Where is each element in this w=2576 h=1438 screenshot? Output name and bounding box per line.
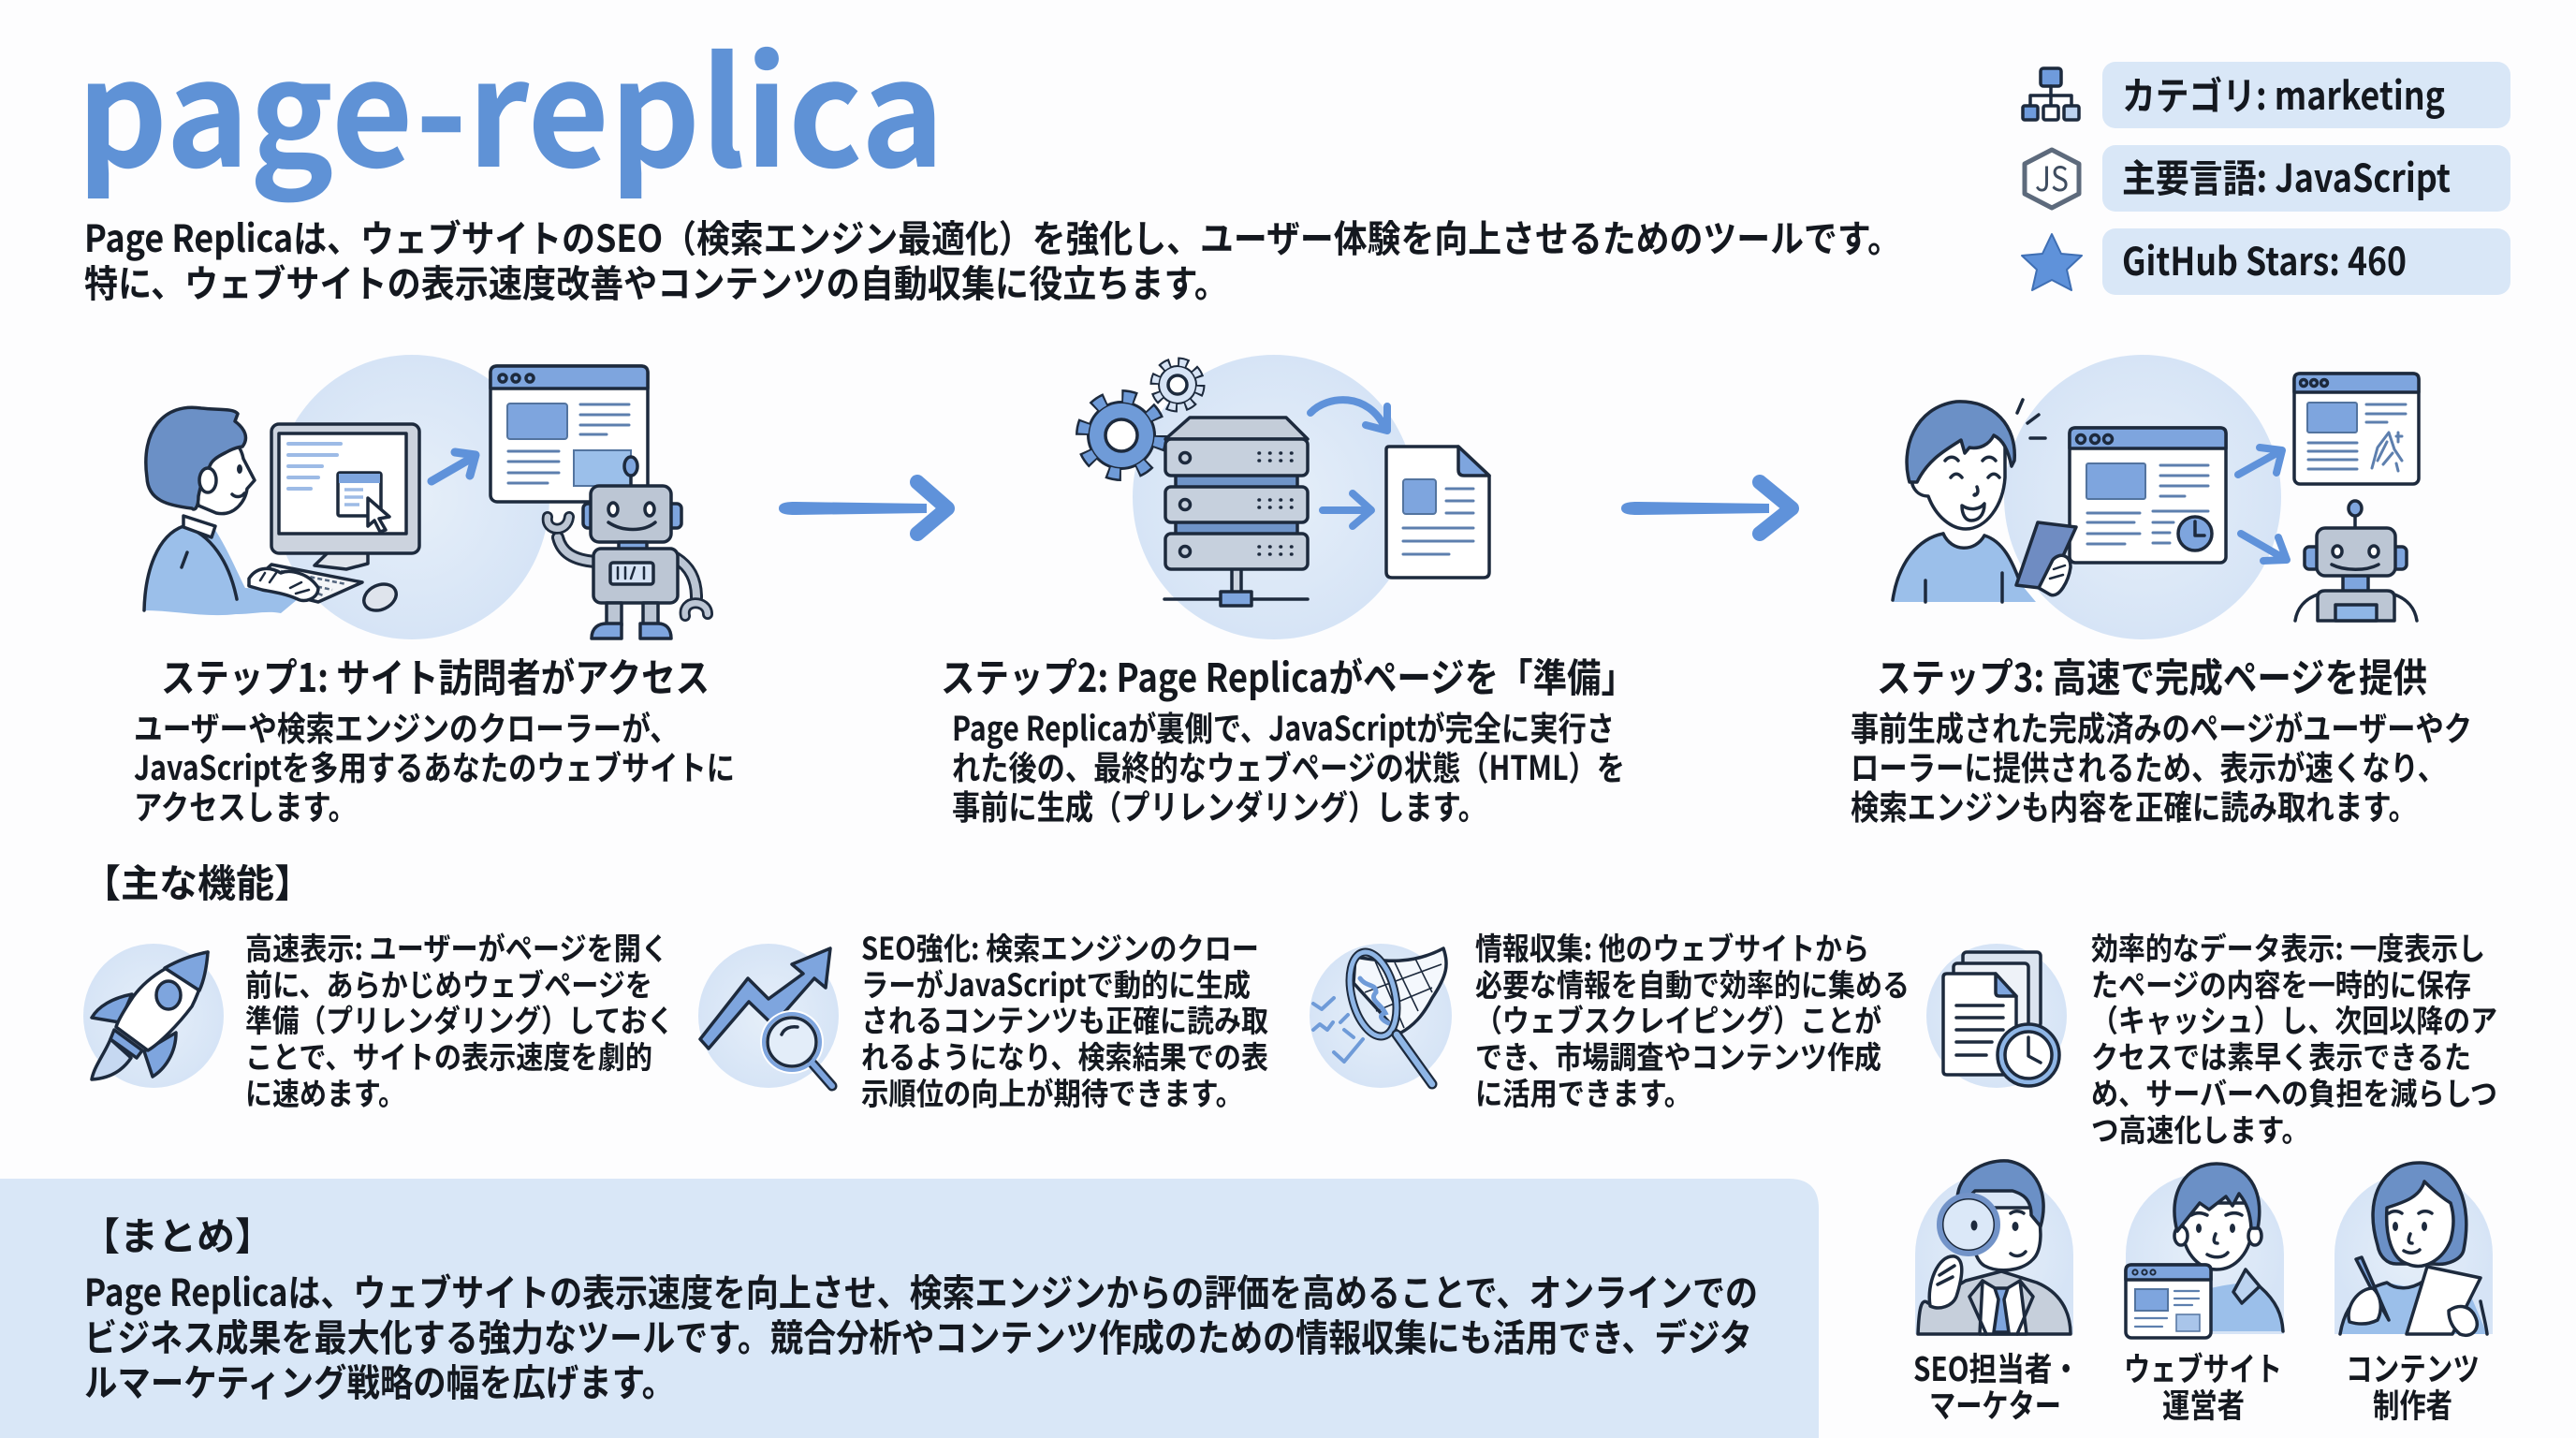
- persona 2 circle: [2126, 1173, 2284, 1334]
- badge: stars: GitHub Stars: 460: [2122, 230, 2407, 286]
- persona: content creator: [2334, 1163, 2493, 1428]
- icon: butterfly net: [1313, 947, 1446, 1084]
- step 3 body text: 検索エンジンも内容を正確に読み取れます。: [1851, 781, 2417, 829]
- step 1 background circle: [274, 355, 549, 639]
- step 1 body text: [134, 702, 735, 829]
- summary text: ビジネス成果を最大化する強力なツールです。競合分析やコンテンツ作成のための情報収集にも活用でき、デジタ: [84, 1308, 1752, 1362]
- feature 1 text: 高速表示: ユーザーがページを開く: [245, 924, 668, 969]
- feature 4 circle: [1926, 944, 2067, 1088]
- icon: large gear: [1083, 397, 1160, 474]
- step 3 browser window small: [2294, 374, 2419, 484]
- persona 3 figure: [2340, 1163, 2487, 1335]
- document: [1386, 447, 1489, 578]
- step 1 panel: [134, 355, 735, 829]
- persona 1 label: [1913, 1343, 2080, 1428]
- feature 1 text: [245, 924, 674, 1114]
- intro text: [84, 209, 1901, 308]
- summary text: ルマーケティング戦略の幅を広げます。: [84, 1353, 675, 1407]
- feature 4 text: [2091, 924, 2497, 1151]
- feature 3 text: 情報収集: 他のウェブサイトから: [1475, 924, 1869, 969]
- summary heading: 【まとめ】: [81, 1205, 273, 1261]
- badge: stars: [2102, 228, 2510, 295]
- feature 1 text: 準備（プリレンダリング）しておく: [245, 996, 674, 1041]
- feature 2 text: されるコンテンツも正確に読み取: [861, 996, 1268, 1041]
- summary panel: [0, 1179, 1819, 1438]
- feature 2 text: 示順位の向上が期待できます。: [861, 1069, 1243, 1114]
- persona 2 label: 運営者: [2162, 1380, 2245, 1428]
- step 1 browser window: [490, 366, 648, 502]
- straight arrow: [1323, 493, 1371, 526]
- step 3 arrow to robot: [2241, 534, 2287, 561]
- persona 2 figure: [2126, 1164, 2283, 1338]
- persona 3 label: [2346, 1343, 2480, 1428]
- icon: JS hexagon: JS: [2035, 153, 2069, 201]
- feature 2 text: [861, 924, 1268, 1114]
- step 3 happy person with phone: [1893, 400, 2045, 602]
- step 2 background circle: [1133, 355, 1415, 639]
- feature 2: SEO: [698, 924, 1268, 1114]
- persona 1 label: SEO担当者・: [1913, 1343, 2080, 1391]
- feature 3 text: [1475, 924, 1910, 1114]
- icon: hierarchy: [2023, 68, 2079, 120]
- persona: website operator: [2124, 1164, 2284, 1428]
- step 2 body text: れた後の、最終的なウェブページの状態（HTML）を: [952, 741, 1625, 790]
- summary text: [84, 1263, 1758, 1407]
- icon: stacked documents and clock: [1943, 952, 2059, 1086]
- server stack: [1164, 418, 1308, 606]
- intro text: 特に、ウェブサイトの表示速度改善やコンテンツの自動収集に役立ちます。: [84, 254, 1228, 308]
- curved arrow: [1310, 400, 1387, 431]
- step 2 body text: [952, 702, 1625, 829]
- feature 1 text: に速めます。: [245, 1069, 405, 1114]
- feature 3: information gathering: [1310, 924, 1910, 1114]
- persona 2 label: [2124, 1343, 2282, 1428]
- badge: category: カテゴリ: marketing: [2122, 65, 2445, 121]
- feature 2 circle: [698, 944, 839, 1088]
- step 3 heading: ステップ3: 高速で完成ページを提供: [1877, 647, 2427, 704]
- heading: main features: 【主な機能】: [82, 852, 313, 908]
- feature 2 text: れるようになり、検索結果での表: [861, 1033, 1268, 1078]
- feature 1 text: ことで、サイトの表示速度を劇的: [245, 1033, 652, 1078]
- feature 4 text: め、サーバーへの負担を減らしつ: [2091, 1069, 2497, 1114]
- step 3 panel: [1851, 355, 2472, 829]
- feature 4 text: 効率的なデータ表示: 一度表示し: [2091, 924, 2485, 969]
- feature 4 text: クセスでは素早く表示できるた: [2091, 1033, 2471, 1078]
- step 3 browser window: [2070, 428, 2226, 563]
- icon: growth arrow and magnifier: [700, 948, 832, 1086]
- step 3 arrow to page: [2238, 448, 2282, 475]
- step 3 robot: [2295, 501, 2417, 621]
- meta badges: [2022, 62, 2510, 295]
- persona 2 label: ウェブサイト: [2124, 1343, 2282, 1391]
- feature 3 text: （ウェブスクレイピング）ことが: [1475, 996, 1881, 1041]
- persona 1 label: マーケター: [1929, 1380, 2061, 1428]
- feature 2 text: ラーがJavaScriptで動的に生成: [861, 961, 1251, 1005]
- persona 3 circle: [2334, 1173, 2493, 1334]
- title: page-replica: [77, 0, 944, 210]
- persona: SEO marketer: [1913, 1161, 2080, 1428]
- feature 1 circle: [83, 944, 224, 1088]
- step 1 body text: アクセスします。: [134, 781, 357, 829]
- feature 1: fast display: [83, 924, 674, 1114]
- feature 3 text: でき、市場調査やコンテンツ作成: [1475, 1033, 1881, 1078]
- feature 4: efficient data display: [1926, 924, 2497, 1151]
- step 1 small arrow: [432, 452, 476, 481]
- feature 3 text: 必要な情報を自動で効率的に集める: [1475, 961, 1910, 1005]
- step 3 body text: [1851, 702, 2472, 829]
- intro text: Page Replicaは、ウェブサイトのSEO（検索エンジン最適化）を強化し、ユーザー体験を向上させるためのツールです。: [84, 209, 1901, 263]
- step 3 body text: ローラーに提供されるため、表示が速くなり、: [1851, 741, 2446, 790]
- icon: small gear: [1155, 362, 1200, 407]
- icon: JS hexagon: [2025, 150, 2079, 208]
- step 3 body text: 事前生成された完成済みのページがユーザーやク: [1851, 702, 2472, 751]
- feature 2 text: SEO強化: 検索エンジンのクロー: [861, 924, 1259, 969]
- step 1 robot: [548, 457, 708, 638]
- step 1 heading: ステップ1: サイト訪問者がアクセス: [161, 647, 710, 704]
- step 3 background circle: [2004, 355, 2281, 639]
- feature 3 text: に活用できます。: [1475, 1069, 1691, 1114]
- step 2 body text: Page Replicaが裏側で、JavaScriptが完全に実行さ: [952, 702, 1615, 751]
- arrow: step 1 to step 2: [779, 482, 947, 534]
- icon: star: [2022, 234, 2082, 290]
- step 3 phone and hand: [2016, 522, 2076, 595]
- step 2 body text: 事前に生成（プリレンダリング）します。: [952, 781, 1486, 829]
- persona 1 figure: [1918, 1161, 2071, 1334]
- icon: rocket: [92, 952, 208, 1079]
- persona 3 label: コンテンツ: [2346, 1343, 2480, 1391]
- step 1 body text: ユーザーや検索エンジンのクローラーが、: [134, 702, 679, 751]
- step 1 person at computer: [144, 407, 298, 615]
- step 1 computer monitor and keyboard: [249, 424, 419, 615]
- summary text: Page Replicaは、ウェブサイトの表示速度を向上させ、検索エンジンからの評価を高めることで、オンラインでの: [84, 1263, 1758, 1317]
- feature 4 text: （キャッシュ）し、次回以降のア: [2091, 996, 2497, 1041]
- step 1 body text: JavaScriptを多用するあなたのウェブサイトに: [134, 741, 735, 790]
- feature 4 text: たページの内容を一時的に保存: [2091, 961, 2471, 1005]
- badge: language: 主要言語: JavaScript: [2122, 147, 2451, 203]
- step 2 panel: [941, 355, 1635, 829]
- step 2 heading: ステップ2: Page Replicaがページを「準備」: [941, 647, 1635, 704]
- feature 4 text: つ高速化します。: [2091, 1106, 2309, 1151]
- persona 3 label: 制作者: [2373, 1380, 2452, 1428]
- persona 1 circle: [1915, 1173, 2073, 1334]
- feature 3 circle: [1310, 944, 1452, 1088]
- arrow: step 2 to step 3: [1621, 482, 1792, 534]
- feature 1 text: 前に、あらかじめウェブページを: [245, 961, 652, 1005]
